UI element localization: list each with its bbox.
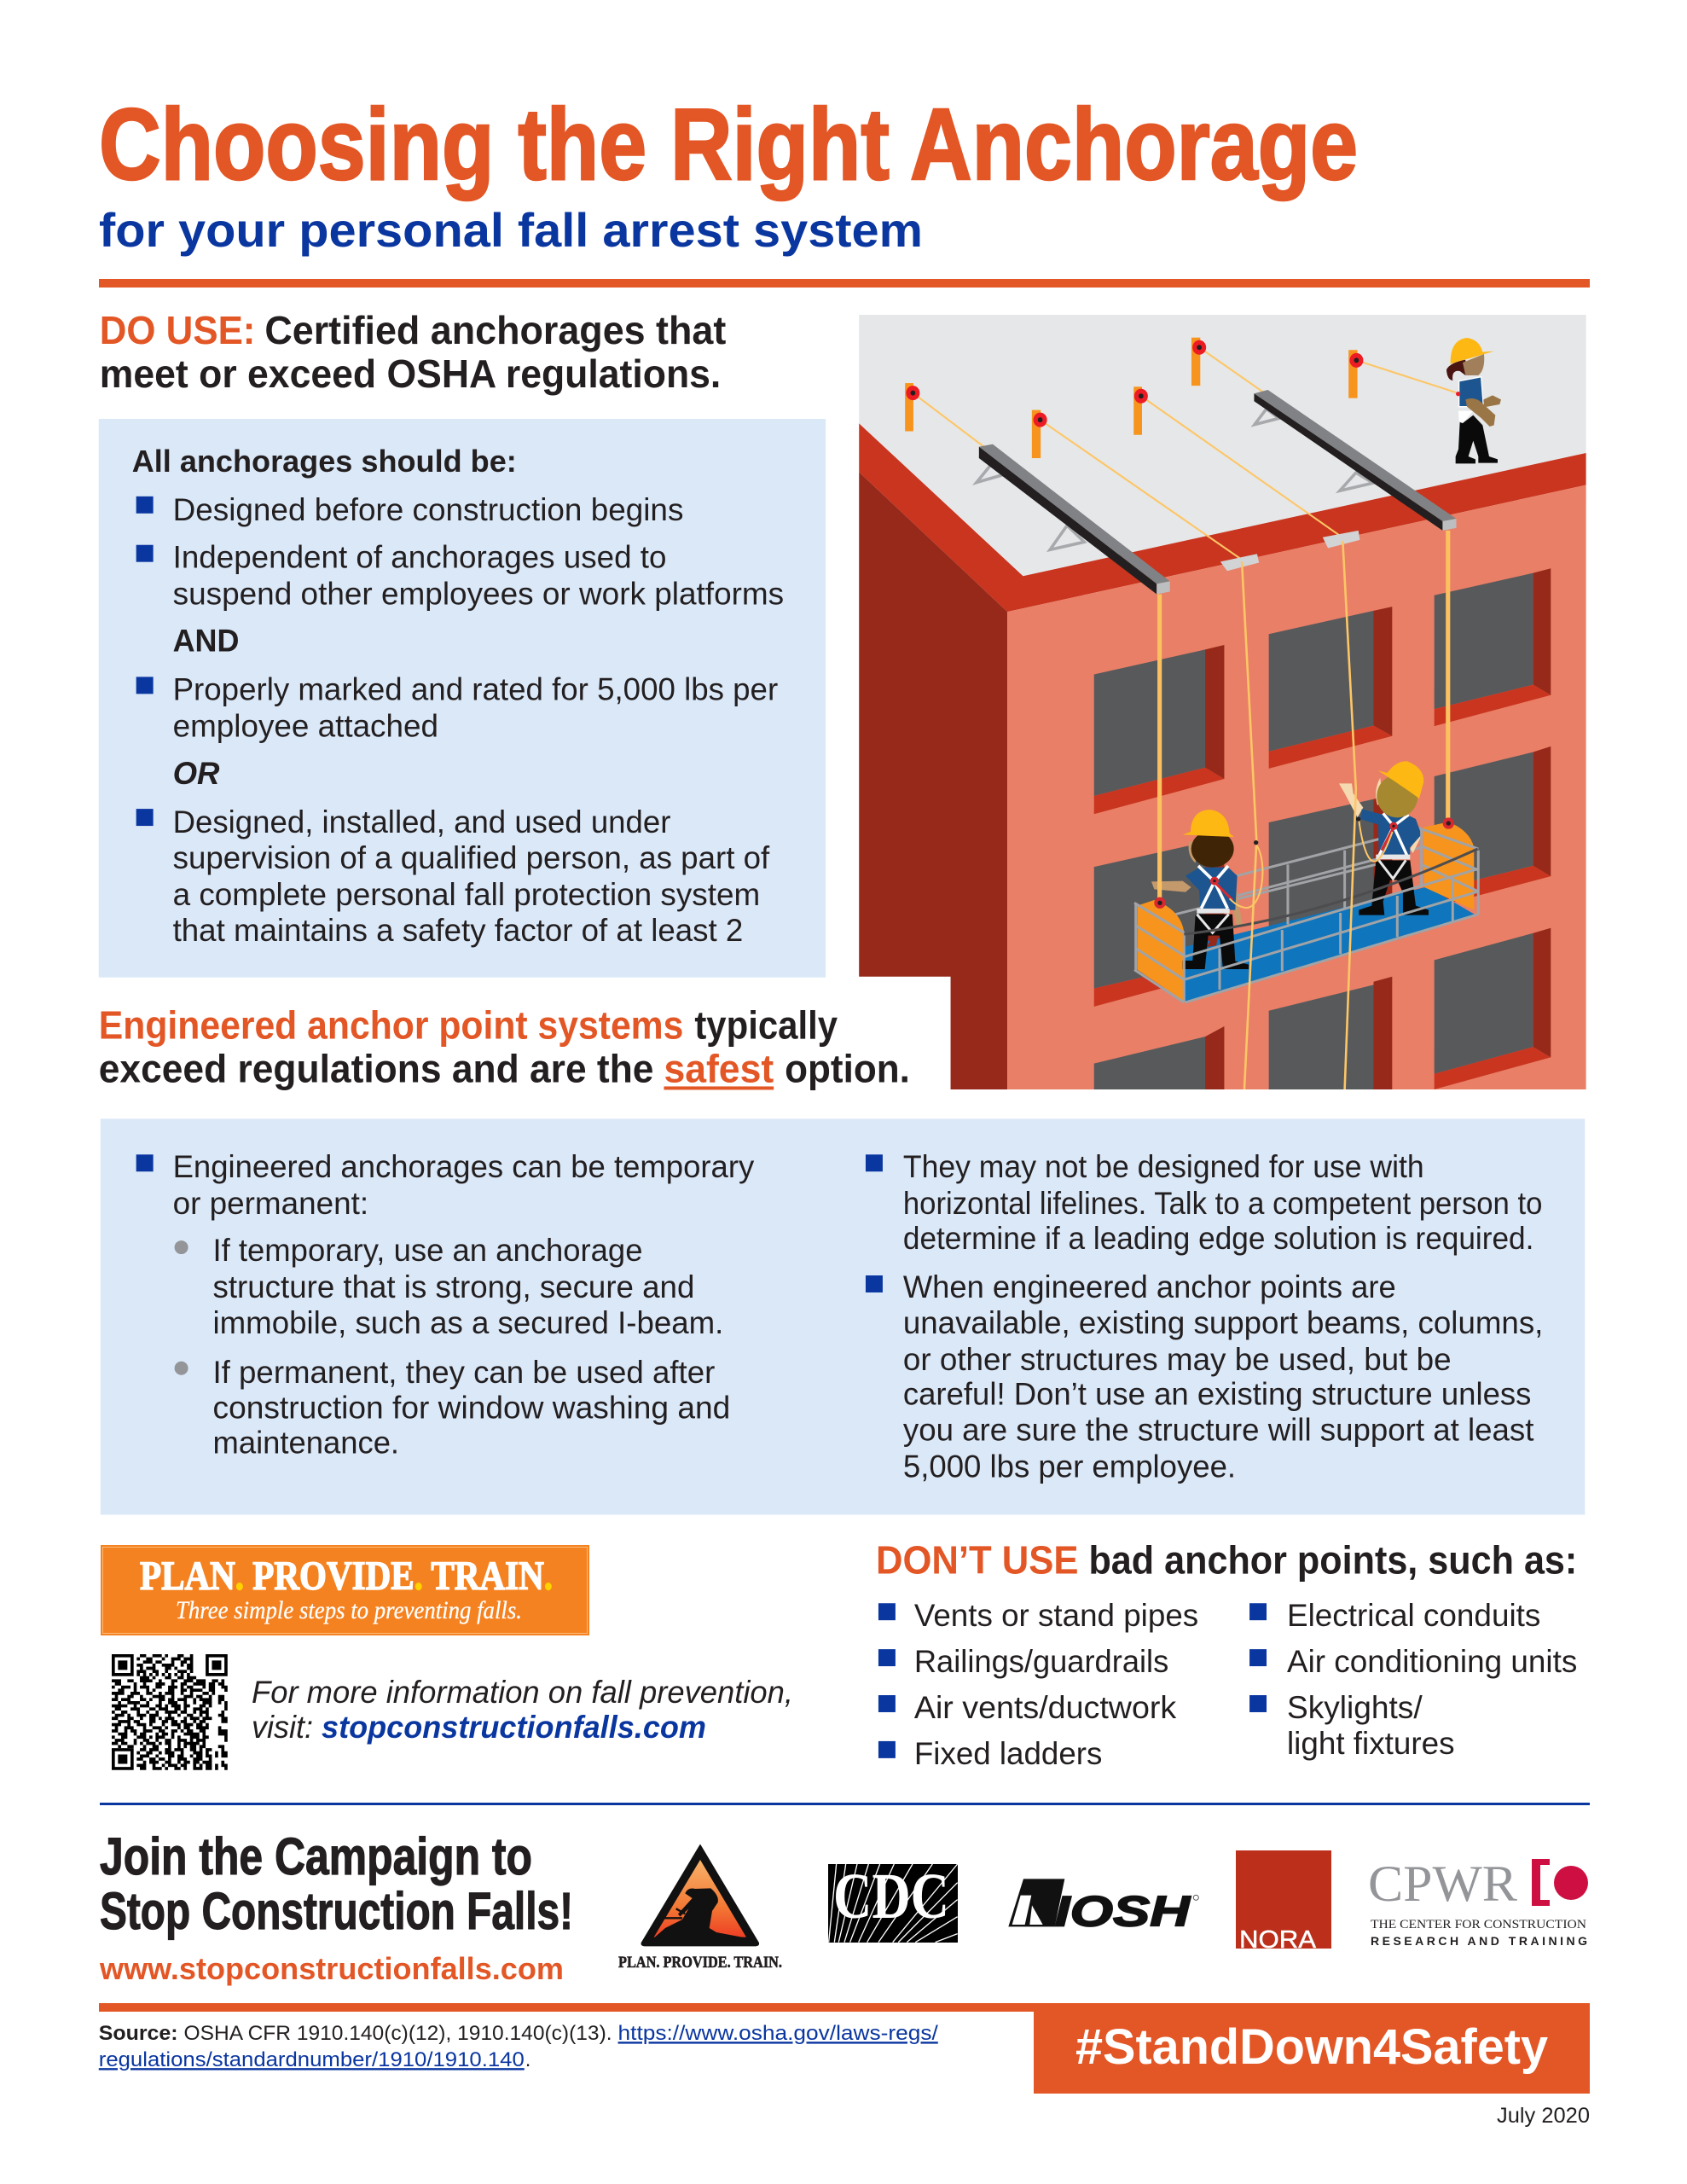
subtitle: for your personal fall arrest system [99, 203, 923, 257]
worker on left of platform [1151, 810, 1249, 969]
building front wall [1007, 485, 1586, 1089]
campaign heading: Stop Construction Falls! [100, 1882, 573, 1940]
heading: don't use: bad anchor points, such as: [1088, 1537, 1577, 1582]
left column bullets: immobile, such as a secured I-beam. [213, 1305, 723, 1340]
heading: engineered anchor point systems [99, 1003, 910, 1090]
QR code [112, 1654, 228, 1770]
worker on the roof [1446, 338, 1501, 463]
campaign heading: Join the Campaign to [100, 1827, 532, 1885]
requirements list [136, 492, 784, 948]
requirements list: suspend other employees or work platforms [173, 577, 784, 612]
list: bad anchor points: Air conditioning units [1287, 1644, 1577, 1679]
left column bullets: Engineered anchorages can be temporary [173, 1149, 755, 1184]
list: bad anchor points: Railings/guardrails [914, 1644, 1168, 1679]
date: July 2020 [1497, 2104, 1590, 2128]
source note [99, 2022, 938, 2071]
suspension ropes and platform hoist cables [1154, 531, 1454, 1089]
list: bad anchor points [878, 1598, 1577, 1771]
heading: engineered anchor point systems: safest [664, 1046, 774, 1090]
source note: . [525, 2048, 530, 2071]
heading: do use [100, 308, 726, 396]
requirements list: a complete personal fall protection system [173, 877, 760, 912]
requirements list: OR [173, 756, 220, 791]
logo: CPWR: CPWR [1368, 1856, 1517, 1912]
requirements list: Designed, installed, and used under [173, 804, 670, 839]
right column bullets: determine if a leading edge solution is required. [903, 1221, 1533, 1256]
logo: CPWR: RESEARCH AND TRAINING [1371, 1934, 1587, 1948]
requirements list: Properly marked and rated for 5,000 lbs per [173, 671, 778, 706]
right column bullets: unavailable, existing support beams, columns, [903, 1305, 1543, 1340]
hashtag banner [1034, 2003, 1590, 2094]
logo: CPWR [1368, 1856, 1588, 1948]
source note: regulations/standardnumber/1910/1910.140 [99, 2048, 525, 2071]
parapet [859, 423, 1586, 612]
roof [859, 315, 1586, 576]
right column bullets: or other structures may be used, but be [903, 1342, 1452, 1377]
requirements list: Independent of anchorages used to [173, 540, 666, 575]
heading: don't use [876, 1537, 1577, 1582]
left column bullets: or permanent: [173, 1186, 368, 1221]
campaign heading [100, 1827, 573, 1940]
requirements list: AND [173, 623, 239, 658]
right column bullets: When engineered anchor points are [903, 1269, 1396, 1304]
worker on right of platform [1339, 761, 1429, 915]
source note: https://www.osha.gov/laws-regs/ [618, 2022, 938, 2045]
left column bullets [136, 1149, 755, 1461]
logo: NORA [1236, 1850, 1331, 1954]
panel: engineered anchorages details [101, 1118, 1585, 1514]
more information text: stopconstructionfalls.com [322, 1710, 706, 1745]
panel: anchorage requirements [99, 419, 826, 978]
more information text [252, 1675, 793, 1745]
left column bullets: structure that is strong, secure and [213, 1269, 694, 1304]
logo: CDC: CDC [833, 1861, 949, 1932]
right column bullets: They may not be designed for use with [903, 1149, 1424, 1184]
panel heading: All anchorages should be: [132, 444, 517, 479]
logo: CPWR: THE CENTER FOR CONSTRUCTION [1371, 1918, 1586, 1931]
roof edge clamps [1220, 531, 1359, 571]
list: bad anchor points: Skylights/ [1287, 1690, 1423, 1725]
logo: NORA: NORA [1239, 1926, 1317, 1954]
building side wall [859, 472, 1007, 1089]
heading: do use: Certified anchorages that [264, 308, 726, 352]
logo: NIOSH [1008, 1879, 1198, 1935]
requirements list: Designed before construction begins [173, 492, 683, 527]
platform front railing [1134, 829, 1478, 1002]
left column bullets: maintenance. [213, 1426, 399, 1461]
banner: plan provide train: PLAN. PROVIDE. TRAIN. [140, 1554, 553, 1599]
title: Choosing the Right Anchorage [99, 88, 1358, 201]
right column bullets: you are sure the structure will support at least [903, 1413, 1533, 1448]
right column bullets [866, 1149, 1543, 1484]
right column bullets: horizontal lifelines. Talk to a competent person to [903, 1186, 1542, 1221]
windows [1094, 568, 1551, 1089]
heading: engineered anchor point systems: typically [694, 1003, 838, 1048]
building with roof, anchors and beams [859, 315, 1586, 1089]
logo: plan provide train triangle: PLAN. PROVIDE. TRAIN. [618, 1954, 782, 1972]
roof beams [977, 390, 1457, 595]
campaign url: www.stopconstructionfalls.com [99, 1951, 564, 1986]
logo: plan provide train triangle [618, 1845, 782, 1972]
banner: plan provide train: Three simple steps to preventing falls. [176, 1596, 522, 1624]
list: bad anchor points: Air vents/ductwork [914, 1690, 1177, 1725]
heading: don't use: DON’T USE [876, 1537, 1078, 1582]
left column bullets: If temporary, use an anchorage [213, 1233, 642, 1268]
left column bullets: construction for window washing and [213, 1391, 730, 1426]
banner: plan provide train [101, 1545, 589, 1635]
heading: engineered anchor point systems: option. [785, 1046, 910, 1090]
heading: engineered anchor point systems: Engineered anchor point systems [99, 1003, 683, 1048]
more information text: For more information on fall prevention, [252, 1675, 793, 1710]
list: bad anchor points: Electrical conduits [1287, 1598, 1540, 1633]
right column bullets: 5,000 lbs per employee. [903, 1449, 1236, 1484]
requirements list: that maintains a safety factor of at least 2 [173, 913, 743, 948]
logo: NIOSH: IOSH [1055, 1887, 1191, 1935]
source note: OSHA CFR 1910.140(c)(12), 1910.140(c)(13). [184, 2022, 612, 2045]
heading: do use: DO USE: [100, 308, 255, 352]
hashtag banner: #StandDown4Safety [1075, 2019, 1548, 2075]
requirements list: employee attached [173, 708, 438, 743]
heading: do use: meet or exceed OSHA regulations. [100, 351, 721, 396]
illustration: workers on suspended platform anchored to building roof [859, 315, 1586, 1089]
left column bullets: If permanent, they can be used after [213, 1355, 715, 1390]
right column bullets: careful! Don’t use an existing structure unless [903, 1377, 1531, 1412]
anchor posts and lifelines [905, 338, 1456, 559]
requirements list: supervision of a qualified person, as part of [173, 840, 770, 875]
heading: engineered anchor point systems: exceed regulations and are the [99, 1046, 653, 1090]
list: bad anchor points: Vents or stand pipes [914, 1598, 1198, 1633]
more information text: visit: [252, 1710, 313, 1745]
list: bad anchor points: light fixtures [1287, 1726, 1455, 1761]
source note: Source: [99, 2022, 178, 2045]
list: bad anchor points: Fixed ladders [914, 1736, 1102, 1771]
suspended platform deck and ends [1137, 822, 1477, 1002]
